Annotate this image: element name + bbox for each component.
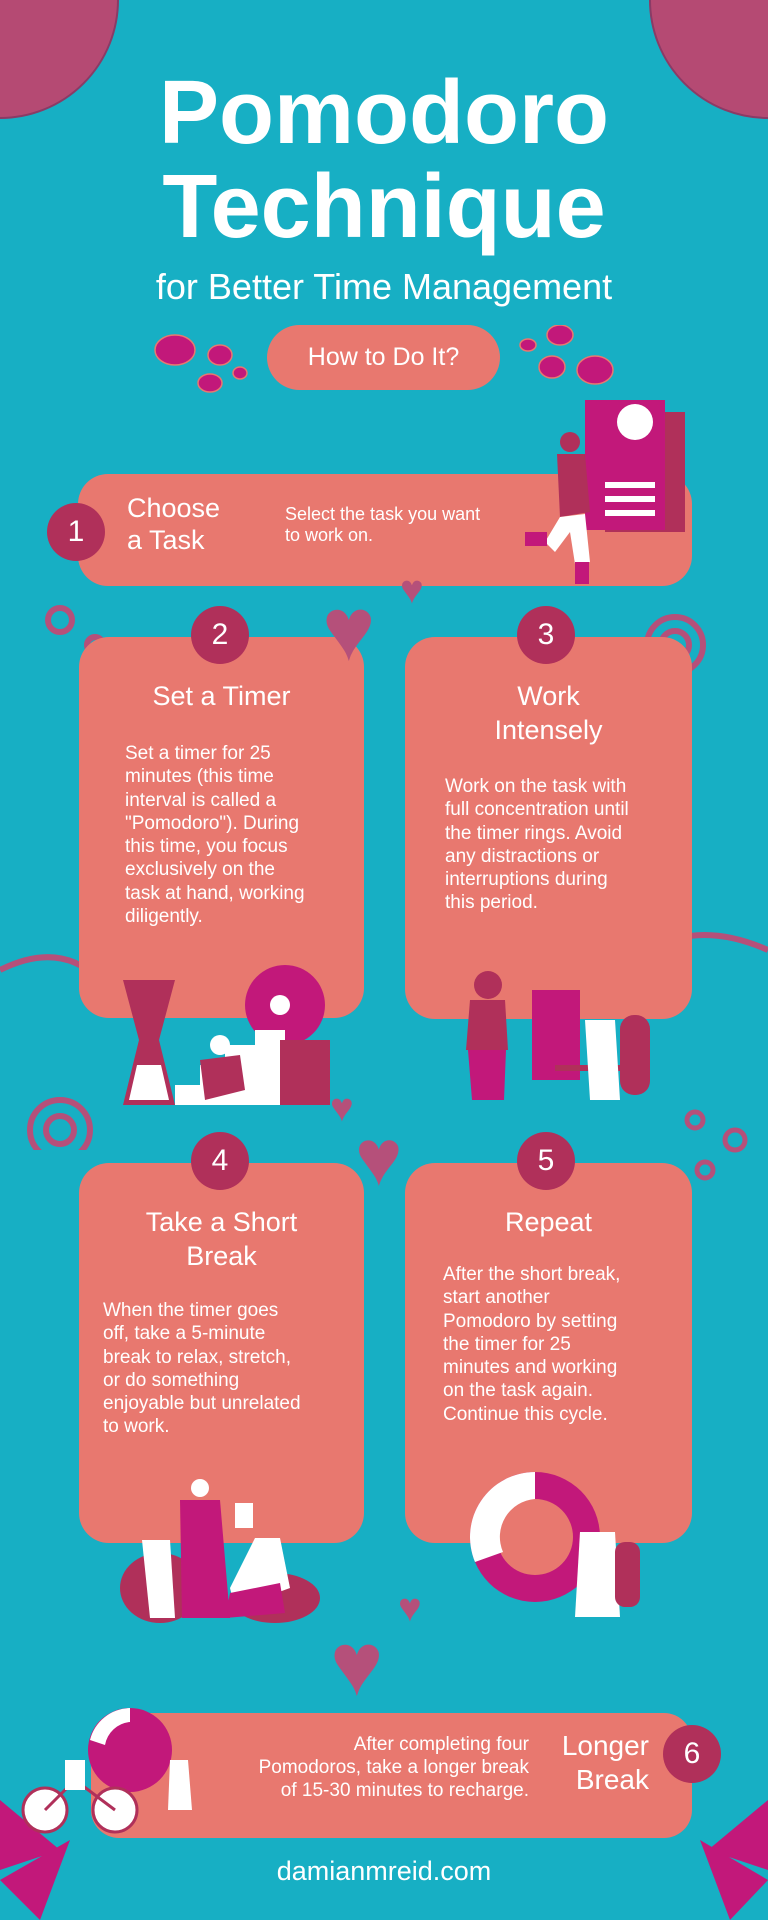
step 4 text bbox=[103, 1300, 301, 1437]
decorative swirl right bbox=[684, 1110, 748, 1180]
illustration: people on beanbags bbox=[120, 1479, 320, 1623]
step 3 text: interruptions during bbox=[445, 869, 608, 890]
step 5 text: Pomodoro by setting bbox=[443, 1311, 617, 1332]
step 6 text bbox=[259, 1734, 529, 1801]
pill: How to Do It? bbox=[267, 325, 500, 390]
pill: How to Do It?: How to Do It? bbox=[308, 343, 459, 371]
title: Technique bbox=[162, 157, 606, 257]
number 2: 2 bbox=[212, 618, 228, 651]
step 2 text: Set a timer for 25 bbox=[125, 743, 271, 764]
step 3 text: full concentration until bbox=[445, 799, 629, 820]
step 6 text: Pomodoros, take a longer break bbox=[259, 1757, 529, 1778]
step 5 text: the timer for 25 bbox=[443, 1334, 571, 1355]
step 1 text: Select the task you want bbox=[285, 504, 480, 524]
icon: heart small mid: ♥ bbox=[330, 1086, 354, 1130]
step 3 text: this period. bbox=[445, 892, 538, 913]
step 6 text: of 15-30 minutes to recharge. bbox=[281, 1780, 529, 1801]
icon: heart small low: ♥ bbox=[398, 1586, 422, 1630]
step 2 text: minutes (this time bbox=[125, 766, 274, 787]
panel: step 3 bbox=[405, 637, 692, 1019]
number 2 bbox=[191, 606, 249, 664]
step 4 title: Break bbox=[186, 1241, 257, 1271]
step 4 text: to work. bbox=[103, 1416, 170, 1437]
number 3 bbox=[517, 606, 575, 664]
step 3 text: Work on the task with bbox=[445, 776, 626, 797]
step 3 text: the timer rings. Avoid bbox=[445, 823, 622, 844]
decorative swirls bbox=[0, 605, 768, 1150]
step 6 text: After completing four bbox=[354, 1734, 529, 1755]
step 1 text: to work on. bbox=[285, 525, 373, 545]
title bbox=[159, 63, 609, 257]
step 3 title bbox=[494, 681, 603, 745]
step 4 text: or do something bbox=[103, 1370, 239, 1391]
step 2 text bbox=[125, 743, 305, 927]
subtitle: for Better Time Management bbox=[156, 266, 612, 307]
step 4 title bbox=[146, 1207, 298, 1271]
panel: step 2 bbox=[79, 637, 364, 1018]
number 4 bbox=[191, 1132, 249, 1190]
step 6 title: Break bbox=[576, 1764, 649, 1795]
step 5 text bbox=[443, 1264, 620, 1425]
step 2 text: diligently. bbox=[125, 906, 203, 927]
step 1 title: Choose bbox=[127, 493, 220, 523]
step 3 text bbox=[445, 776, 629, 913]
step 2 text: this time, you focus bbox=[125, 836, 288, 857]
step 4 title: Take a Short bbox=[146, 1207, 297, 1237]
panel: step 1 bbox=[78, 474, 692, 586]
step 4 text: enjoyable but unrelated bbox=[103, 1393, 301, 1414]
step 2 text: interval is called a bbox=[125, 790, 276, 811]
step 4 text: break to relax, stretch, bbox=[103, 1347, 291, 1368]
step 5 text: Continue this cycle. bbox=[443, 1404, 608, 1425]
number 5: 5 bbox=[538, 1144, 554, 1177]
icon: heart mid: ♥ bbox=[355, 1113, 402, 1202]
step 2 text: exclusively on the bbox=[125, 859, 275, 880]
icon: heart low big: ♥ bbox=[330, 1615, 383, 1715]
illustration: bicycle couple bbox=[22, 1708, 192, 1834]
panel: step 4 bbox=[79, 1163, 364, 1543]
step 4 text: off, take a 5-minute bbox=[103, 1323, 265, 1344]
step 1 title: a Task bbox=[127, 525, 205, 555]
number 6: 6 bbox=[684, 1737, 700, 1770]
panel: step 5 bbox=[405, 1163, 692, 1543]
decorative dots bbox=[154, 325, 614, 393]
number 6 bbox=[663, 1725, 721, 1783]
step 5 text: minutes and working bbox=[443, 1357, 617, 1378]
icon: heart big: ♥ bbox=[322, 580, 375, 680]
title: Pomodoro bbox=[159, 63, 609, 163]
icon: heart small: ♥ bbox=[400, 568, 424, 612]
step 3 title: Intensely bbox=[494, 715, 603, 745]
number 5 bbox=[517, 1132, 575, 1190]
step 3 text: any distractions or bbox=[445, 846, 599, 867]
step 5 text: After the short break, bbox=[443, 1264, 620, 1285]
step 3 title: Work bbox=[517, 681, 580, 711]
number 1: 1 bbox=[68, 515, 84, 548]
step 2 title: Set a Timer bbox=[152, 681, 291, 711]
step 4 text: When the timer goes bbox=[103, 1300, 278, 1321]
number 3: 3 bbox=[538, 618, 554, 651]
step 1 title bbox=[127, 493, 220, 555]
illustration: woman with form bbox=[525, 400, 685, 584]
step 5 title: Repeat bbox=[505, 1207, 592, 1237]
number 1 bbox=[47, 503, 105, 561]
illustration: circle chart with people bbox=[470, 1472, 640, 1617]
step 6 title bbox=[562, 1730, 649, 1795]
step 1 text bbox=[285, 504, 480, 545]
illustration: hourglass and stairs bbox=[123, 965, 330, 1105]
step 6 title: Longer bbox=[562, 1730, 649, 1761]
panel: step 6 bbox=[91, 1713, 692, 1838]
step 2 text: "Pomodoro"). During bbox=[125, 813, 299, 834]
footer: website: damianmreid.com bbox=[277, 1856, 491, 1886]
step 5 text: start another bbox=[443, 1287, 550, 1308]
number 4: 4 bbox=[212, 1144, 228, 1177]
step 5 text: on the task again. bbox=[443, 1380, 593, 1401]
illustration: two people at board bbox=[466, 971, 650, 1100]
step 2 text: task at hand, working bbox=[125, 883, 305, 904]
